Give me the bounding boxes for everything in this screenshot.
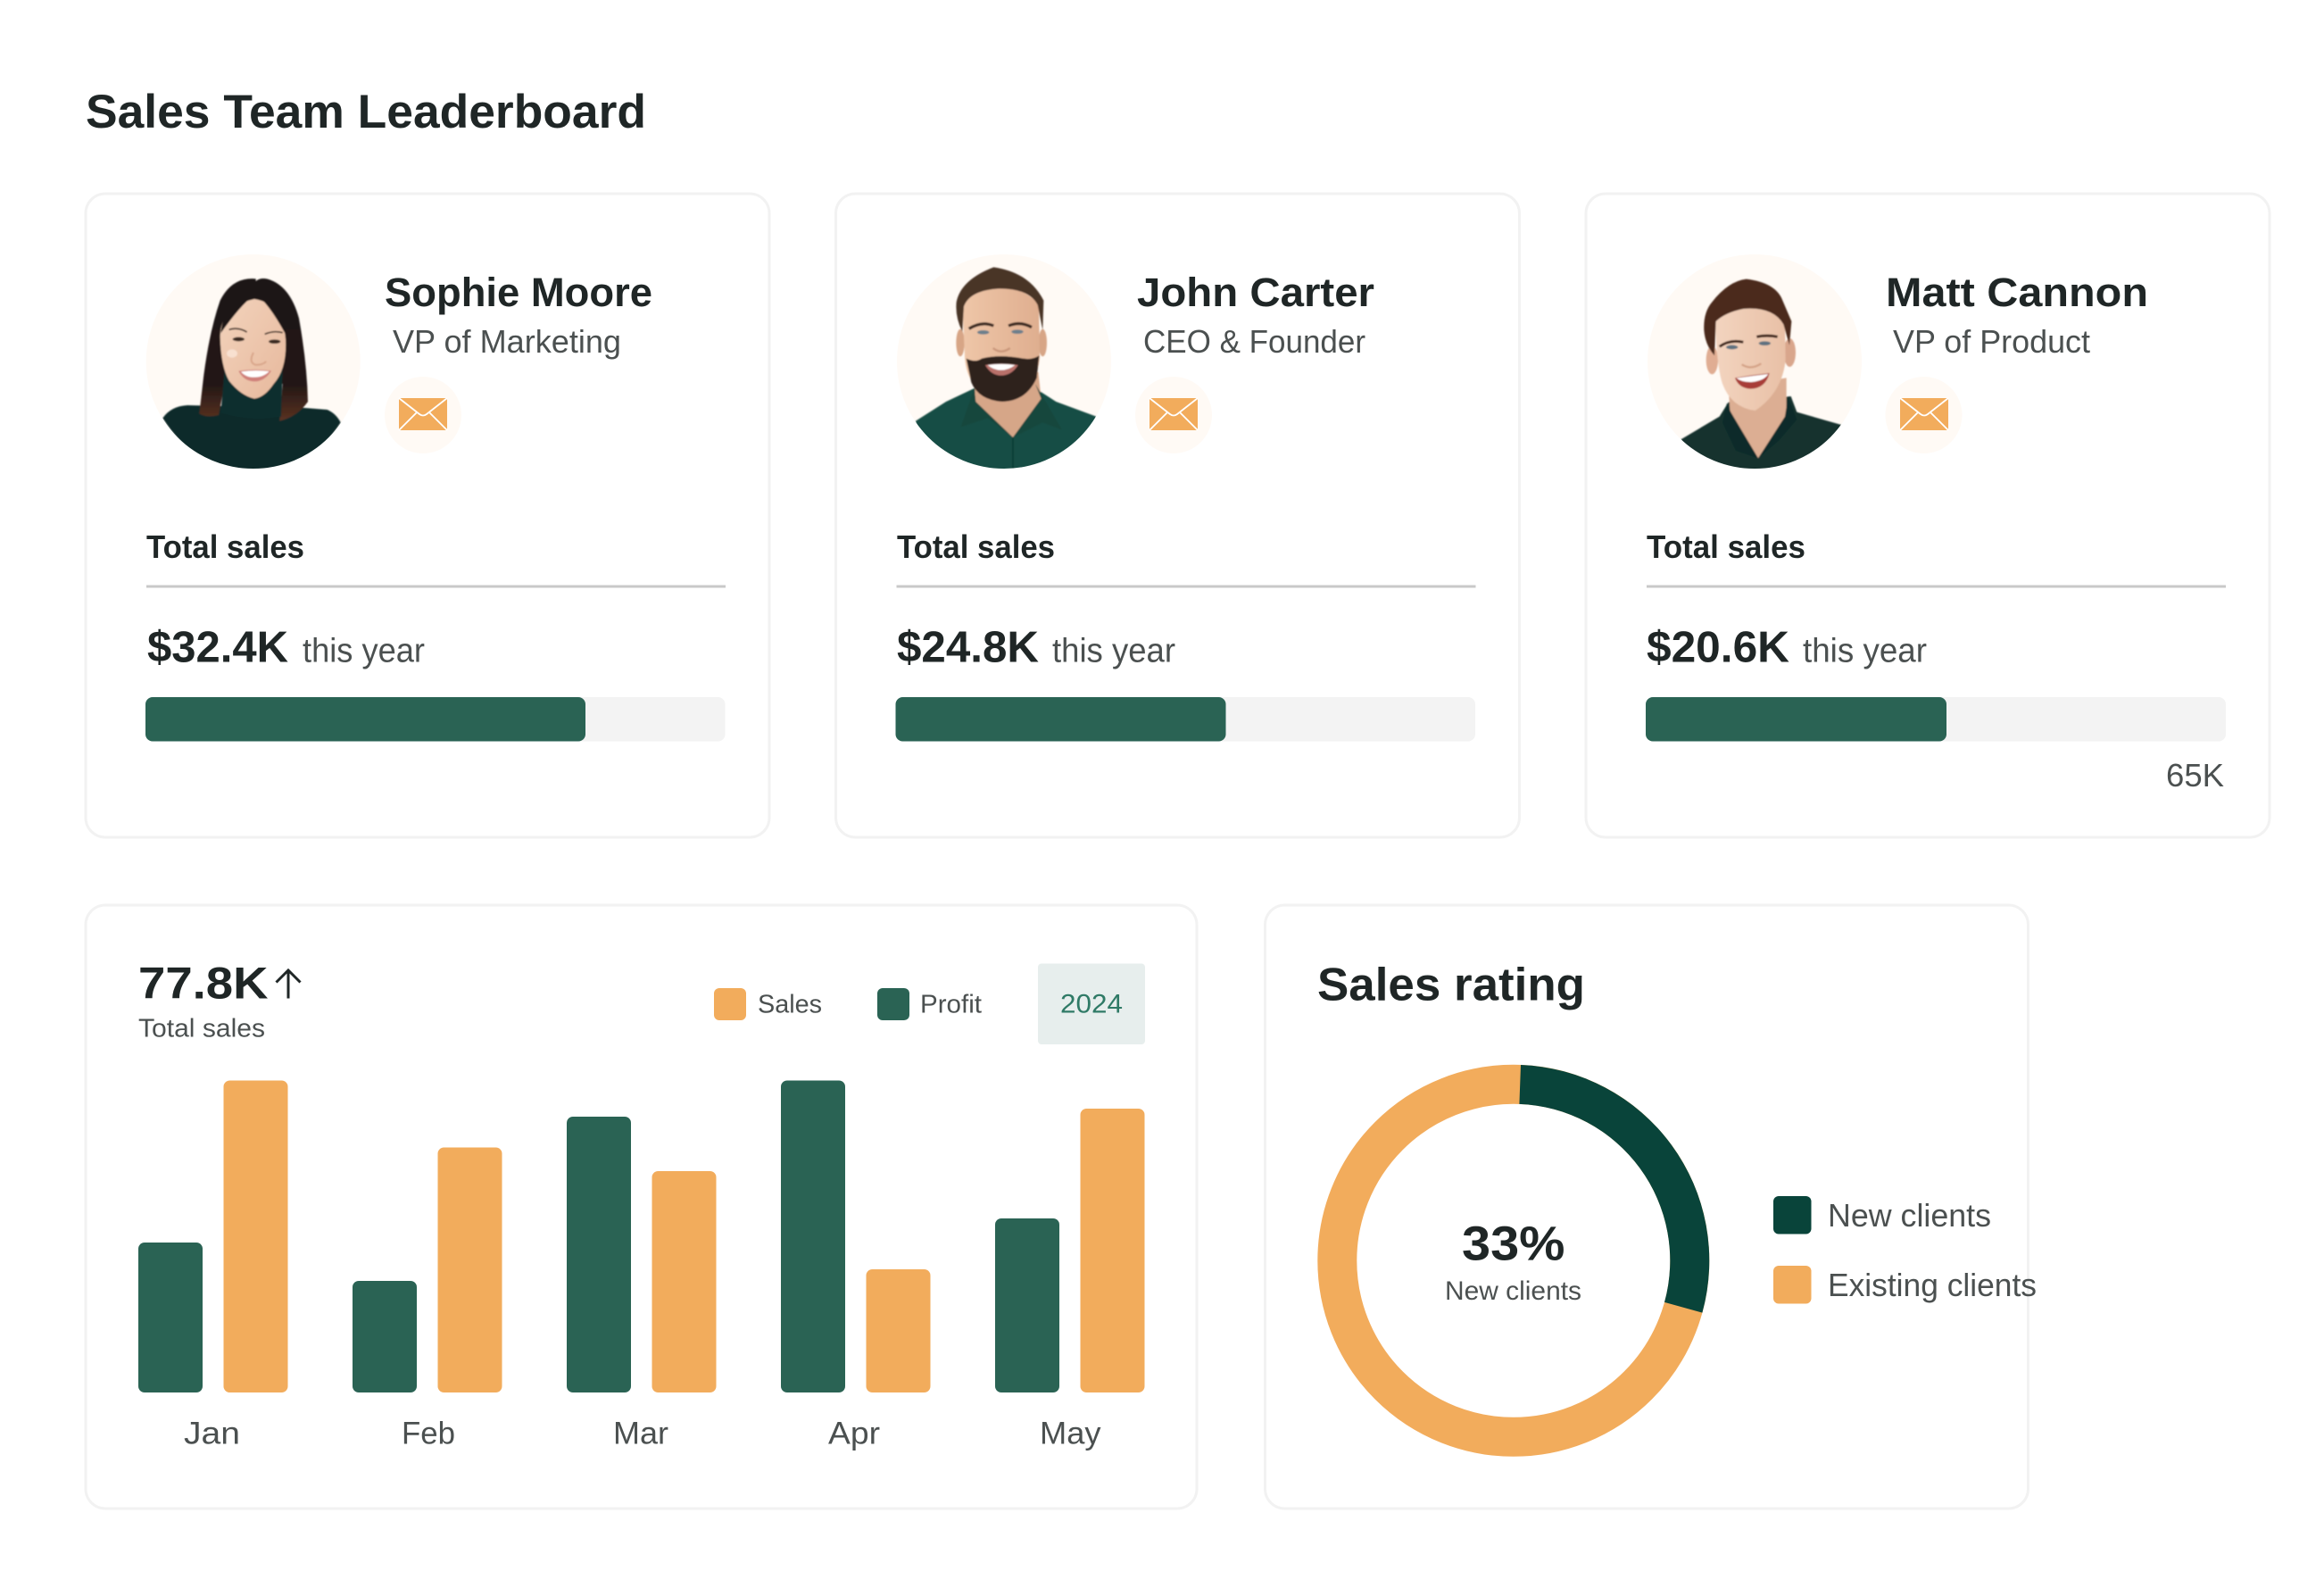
icon: email: [1135, 377, 1212, 453]
portrait: Matt Cannon: [1648, 254, 1862, 470]
panel: Matt Cannon card: [1586, 194, 2270, 837]
legend: existing clients: Existing clients: [1828, 1267, 2037, 1303]
panel: sales rating: [1266, 905, 2037, 1509]
bars: Jan: [138, 1080, 287, 1392]
value: $20.6K: [1647, 623, 1789, 671]
month labels: Apr: [828, 1416, 880, 1451]
icon: email: [385, 377, 461, 453]
bars: Apr: [781, 1080, 930, 1392]
bar chart: [138, 1080, 1144, 1451]
role: CEO & Founder: [1143, 323, 1365, 360]
month labels: May: [1040, 1416, 1101, 1451]
legend: sales: [714, 988, 822, 1020]
value caption: this year: [1052, 632, 1175, 669]
month labels: Mar: [613, 1416, 668, 1451]
value: $32.4K: [147, 623, 288, 671]
portrait: Sophie Moore: [146, 254, 361, 471]
progress bar: [145, 697, 725, 741]
icon: email: [1885, 377, 1962, 453]
year selector: [1038, 964, 1145, 1044]
month labels: Feb: [402, 1416, 455, 1451]
month labels: Jan: [184, 1416, 240, 1451]
value caption: this year: [1803, 632, 1927, 669]
year selector: 2024: [1060, 989, 1123, 1019]
total sales value: 77.8K: [138, 959, 268, 1009]
heading: Sales rating: [1317, 959, 1585, 1010]
month labels: [184, 1416, 1101, 1451]
name: John Carter: [1137, 270, 1374, 315]
bars: Mar: [567, 1117, 716, 1392]
donut center value: 33%: [1462, 1218, 1565, 1271]
role: VP of Marketing: [393, 323, 621, 360]
panel: Sophie Moore card: [86, 194, 769, 837]
panel: John Carter card: [835, 194, 1519, 837]
legend: sales: Sales: [758, 991, 822, 1019]
name: Matt Cannon: [1886, 270, 2148, 315]
value caption: this year: [303, 632, 425, 669]
total sales caption: Total sales: [138, 1014, 265, 1043]
legend: new clients: New clients: [1828, 1197, 1991, 1234]
progress target: 65K: [2166, 757, 2224, 794]
icon: up arrow: [277, 970, 300, 998]
title: Sales Team Leaderboard: [86, 86, 646, 138]
label: total sales: Total sales: [146, 528, 304, 565]
progress bar: [1646, 697, 2226, 741]
legend: profit: [877, 988, 982, 1020]
donut chart: [1337, 1065, 1709, 1437]
label: total sales: Total sales: [1647, 528, 1805, 565]
bars: May: [995, 1109, 1144, 1392]
bars: Feb: [353, 1148, 502, 1392]
role: VP of Product: [1893, 323, 2090, 360]
panel: monthly sales chart: [86, 905, 1197, 1509]
portrait: John Carter: [897, 254, 1111, 470]
label: total sales: Total sales: [897, 528, 1055, 565]
name: Sophie Moore: [385, 270, 652, 315]
value: $24.8K: [897, 623, 1039, 671]
legend: profit: Profit: [920, 991, 982, 1019]
donut center caption: New clients: [1445, 1276, 1581, 1306]
progress bar: [896, 697, 1475, 741]
